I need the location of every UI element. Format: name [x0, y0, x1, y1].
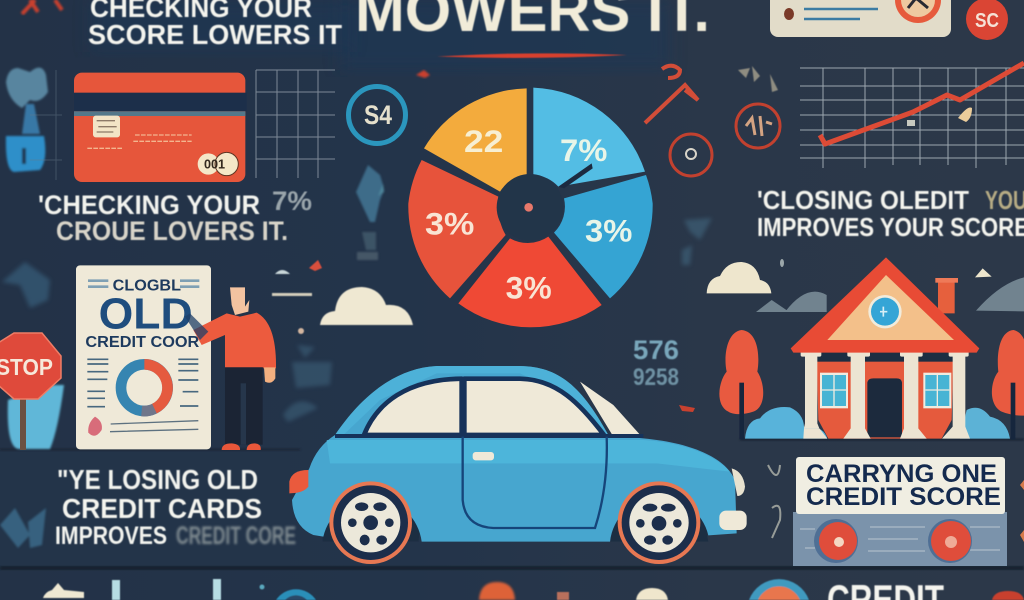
slice: bottom red: 3%: [506, 270, 552, 305]
slice: mid blue: [554, 175, 653, 298]
front wheel: [618, 481, 700, 564]
icon: faded bird shapes beside car: [283, 345, 332, 422]
statement: closing old credit improves your score: [757, 185, 1024, 242]
icon: faded blue shapes left: [2, 262, 50, 308]
document lines: [87, 359, 198, 407]
chimney: [938, 282, 955, 313]
car tail light: [289, 470, 308, 493]
card small print: [87, 135, 192, 148]
red coin: [966, 0, 1008, 40]
car door: [463, 437, 607, 528]
statement: checking your credit lowers it: 'CHECKING YOUR: [38, 190, 260, 220]
car body: [292, 366, 737, 542]
light bars: [112, 580, 120, 600]
faint grid left: [30, 70, 62, 180]
bushes: [745, 407, 827, 439]
roof: [791, 257, 979, 353]
red coin: SC: [975, 10, 999, 32]
slice: left orange-red: [408, 160, 506, 298]
cloud center left: [320, 287, 413, 325]
slice: mid blue: 3%: [585, 214, 632, 249]
door: [867, 378, 902, 437]
top right cream box: [770, 0, 951, 37]
icon: stop sign: [0, 333, 64, 450]
icon: red tool: [645, 66, 698, 123]
statement: closing old credit cards improves: IMPROVES: [55, 522, 167, 550]
right edge marks: [1020, 480, 1024, 542]
statement: closing old credit cards improves: CREDIT CORE: [176, 522, 296, 550]
faded numbers: 9258: [633, 364, 679, 391]
car bumper: [719, 511, 747, 530]
title underline: [437, 53, 627, 58]
icon: small scattered shapes: [738, 66, 778, 92]
windows: [820, 373, 951, 408]
slice: light blue: 7%: [560, 133, 607, 168]
slice: light blue: [533, 88, 645, 187]
car windshield: [580, 382, 639, 437]
carrying credit score panel: [793, 457, 1007, 566]
icon: red ring with zero: [670, 134, 712, 176]
cream dome: [636, 588, 668, 600]
slice: bottom red: [458, 237, 602, 327]
pie hub: [497, 163, 593, 241]
credit card: [74, 73, 247, 182]
slice: left orange-red: 3%: [425, 207, 474, 242]
statement: closing old credit cards improves: CREDIT CARDS: [62, 493, 262, 524]
slice: yellow: 22: [464, 124, 503, 159]
panel label: [796, 457, 1005, 514]
columns: [801, 349, 970, 439]
line chart with grid: [800, 63, 1024, 168]
hills: [756, 277, 1024, 312]
carrying credit score panel: CARRYNG ONE: [806, 460, 997, 488]
car door handle: [473, 452, 494, 460]
statement: checking your credit lowers it: [38, 190, 288, 246]
panel dials: [814, 519, 858, 563]
orange target: [749, 579, 809, 600]
card badge: [198, 152, 238, 176]
document: close old credit cards: [76, 265, 276, 450]
document donut chart: [121, 364, 168, 411]
document: close old credit cards: CREDIT COOR: [85, 334, 199, 351]
faded numbers: [633, 335, 679, 391]
percent label faded: 7%: [272, 186, 312, 216]
icon: red figure top left: [22, 0, 62, 14]
wheel arches: [322, 483, 708, 542]
cloud icon: [43, 583, 84, 598]
heading: checking your score lowers it: [88, 0, 342, 50]
small scattered icons: [272, 260, 322, 334]
icon: faded blue figures lower left: [0, 508, 46, 548]
carrying credit score panel: CREDIT SCORE: [806, 483, 1001, 511]
small red tool: [557, 592, 569, 600]
trees: [719, 330, 1024, 439]
card chip: [93, 116, 120, 137]
statement: checking your credit lowers it: CROUE LOVERS IT.: [56, 216, 288, 246]
car headlight: [732, 468, 745, 496]
statement: closing old credit cards improves: "YE LOSING OLD: [57, 464, 258, 495]
rear wheel: [329, 481, 412, 564]
small marker above cloud: [780, 259, 784, 267]
statement: closing old credit improves your score: 'CLOSING OLEDIT: [757, 185, 969, 215]
icon: faded ribbon figure: [356, 165, 384, 260]
statement: closing old credit cards improves: [55, 464, 296, 550]
score circle: S4: [364, 100, 392, 130]
document: close old credit cards: OLD: [99, 290, 193, 339]
pie chart: [408, 88, 653, 327]
blue target: [260, 584, 264, 590]
bottom strip icons: [43, 579, 1024, 600]
small red mark: [416, 70, 430, 78]
orange blob: [479, 582, 515, 600]
house walls: [817, 360, 953, 439]
small red mark: [679, 405, 695, 412]
icon: faded blue figure left: [6, 68, 48, 172]
icon: faded blue bird: [682, 218, 712, 265]
icon: red ring with mark: [736, 104, 780, 148]
faded numbers: 576: [633, 335, 679, 365]
heading: checking your score lowers it: SCORE LOWERS IT: [88, 19, 342, 50]
document seal and footer: [88, 417, 102, 436]
small icons beside panel: [768, 465, 780, 538]
car windows: [364, 379, 604, 435]
red corner blob: [992, 591, 1024, 600]
document: close old credit cards: CLOGBL: [113, 278, 181, 295]
clock: [868, 295, 902, 328]
clouds: [707, 262, 771, 293]
person pointing: [185, 287, 276, 450]
panel base: [793, 512, 1007, 566]
card badge: 001: [204, 157, 225, 171]
house scene: [707, 257, 1024, 439]
slice: yellow: [424, 88, 527, 192]
score circle: [348, 86, 406, 144]
car: [289, 366, 747, 564]
grid beside card: [256, 70, 335, 178]
